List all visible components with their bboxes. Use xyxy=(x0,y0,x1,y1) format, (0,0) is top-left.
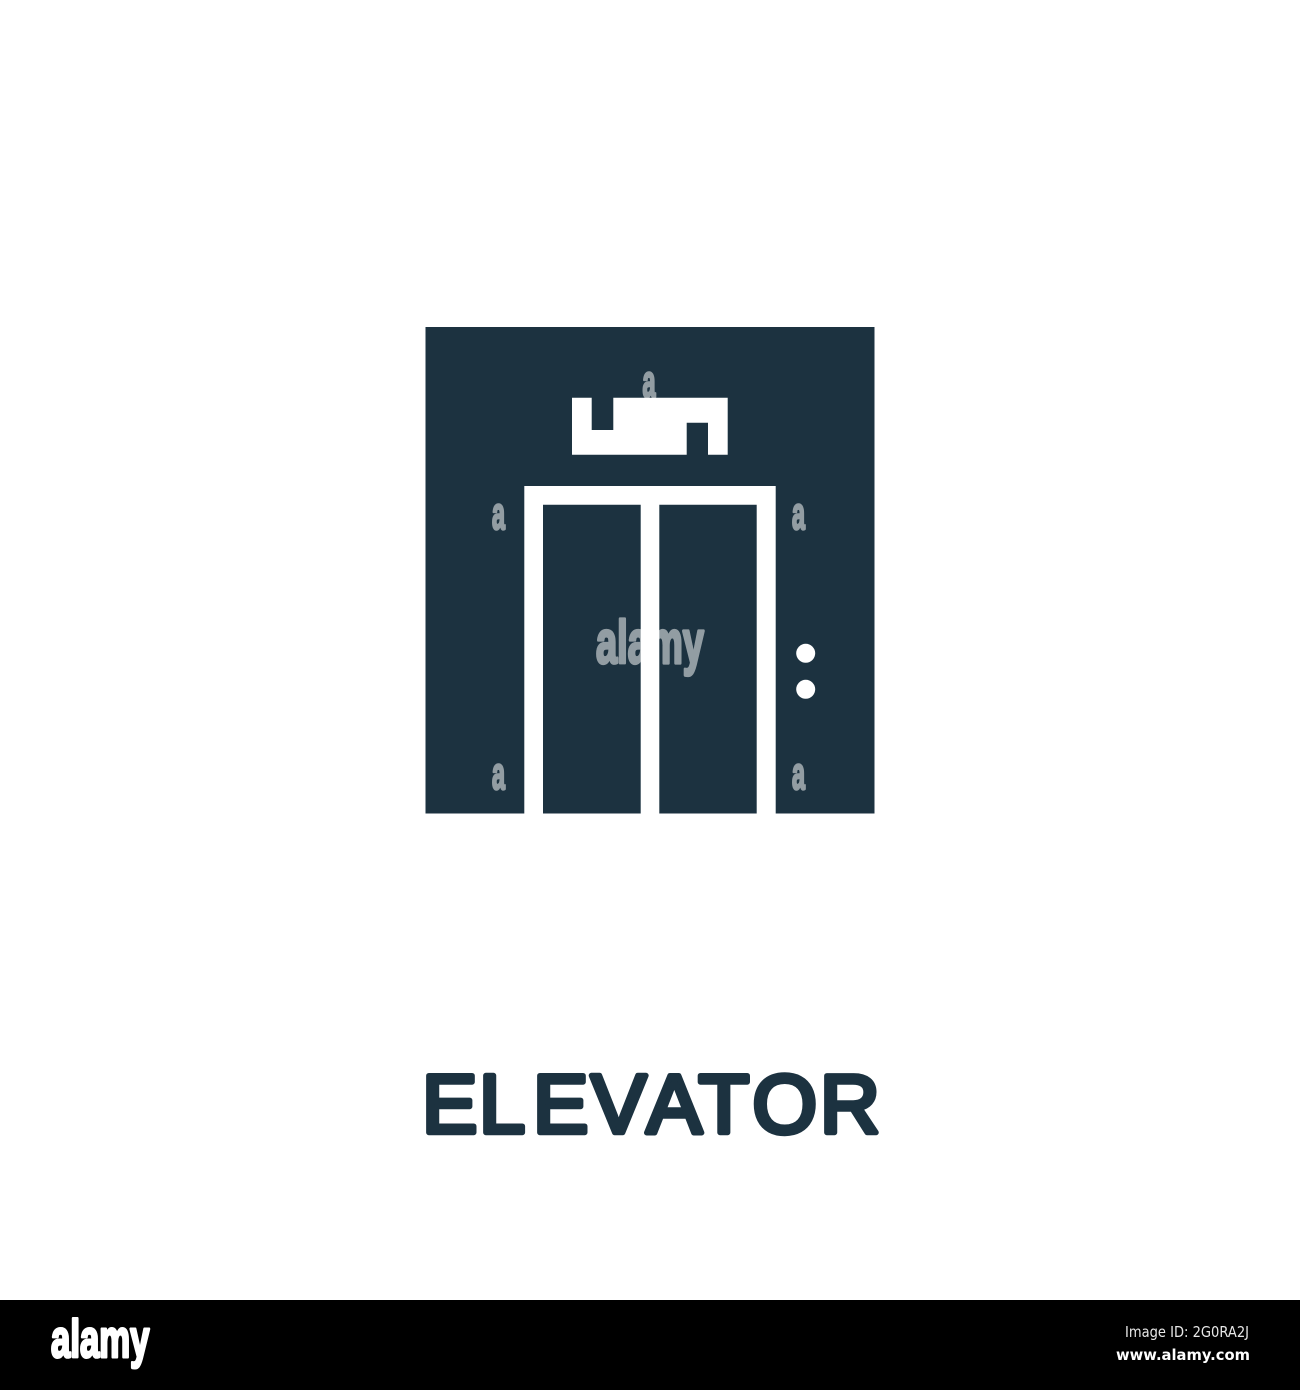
title: ELEVATOR xyxy=(422,1058,880,1150)
footer image id: Image ID: 2G0RA2J xyxy=(1125,1323,1249,1341)
watermark: right upper letter: a xyxy=(792,488,806,539)
icon: elevator door frame xyxy=(524,486,776,814)
icon: dark building square xyxy=(426,327,874,814)
watermark: left lower letter: a xyxy=(492,748,506,799)
icon: call button up xyxy=(796,644,815,663)
watermark: centre word: alamy xyxy=(596,609,704,676)
icon: call button down xyxy=(796,680,815,699)
watermark: left upper letter: a xyxy=(492,488,506,539)
watermark: right lower letter: a xyxy=(792,748,806,799)
watermark: top letter: a xyxy=(642,356,656,407)
footer background xyxy=(0,1300,1300,1390)
footer logo: alamy xyxy=(51,1310,150,1369)
footer url: www.alamy.com xyxy=(1116,1346,1250,1364)
icon: elevator xyxy=(426,327,874,814)
icon: elevator floor sign xyxy=(572,398,728,455)
footer bar xyxy=(0,1300,1300,1390)
watermark letters over icon xyxy=(492,356,806,799)
